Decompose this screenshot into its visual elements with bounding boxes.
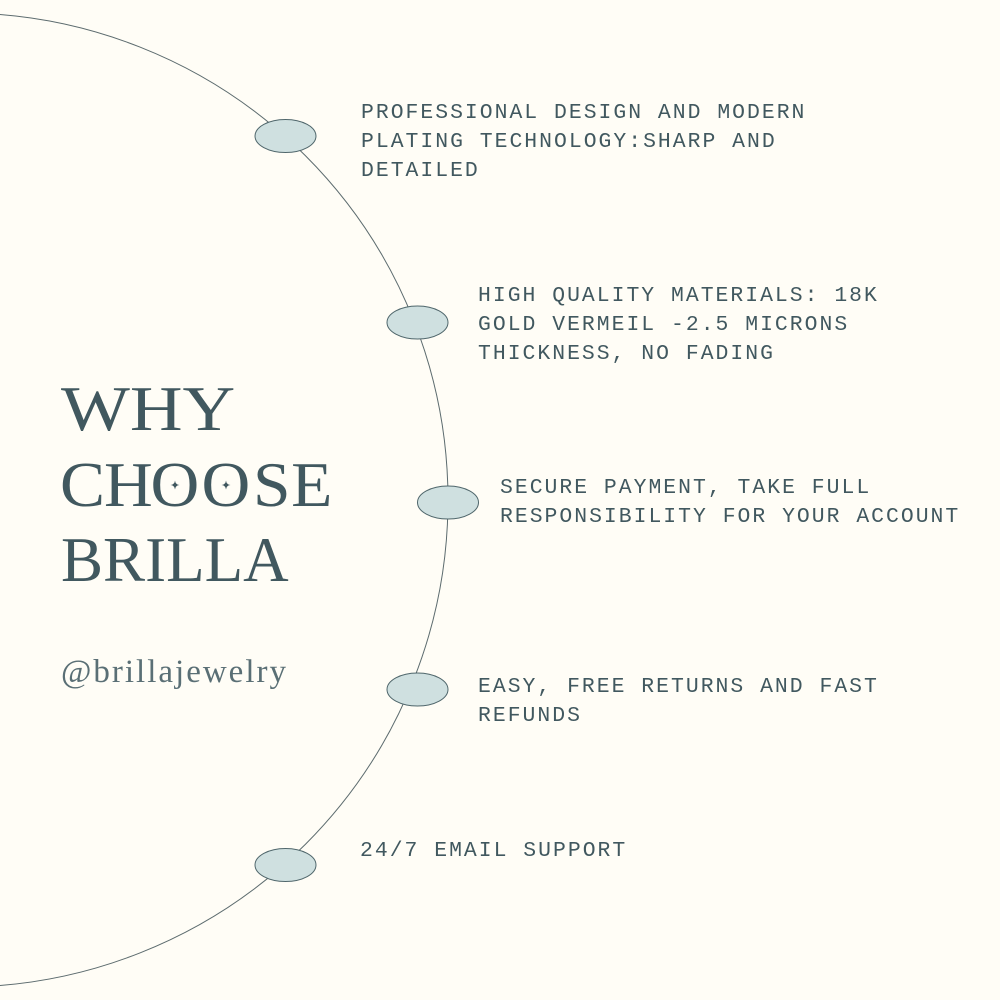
text block: design: DETAILED <box>361 159 480 183</box>
handle: @brillajewelry <box>61 654 288 690</box>
text block: design: PROFESSIONAL DESIGN AND MODERN <box>361 101 806 125</box>
text block: returns: EASY, FREE RETURNS AND FAST <box>478 675 879 699</box>
text block: materials <box>478 284 879 366</box>
text block: payment <box>500 476 960 529</box>
text block: materials: THICKNESS, NO FADING <box>478 342 775 366</box>
title <box>60 373 332 595</box>
text block: returns: REFUNDS <box>478 704 582 728</box>
text block: returns <box>478 675 879 728</box>
title: BRILLA <box>61 524 289 595</box>
title: CHOOSE <box>60 450 332 521</box>
text block: design <box>361 101 806 183</box>
text block: support: 24/7 EMAIL SUPPORT <box>360 839 627 863</box>
text block: design: PLATING TECHNOLOGY:SHARP AND <box>361 130 777 154</box>
text block: payment: RESPONSIBILITY FOR YOUR ACCOUNT <box>500 505 960 529</box>
text block: payment: SECURE PAYMENT, TAKE FULL <box>500 476 871 500</box>
text block: materials: GOLD VERMEIL -2.5 MICRONS <box>478 313 849 337</box>
icon: sparkles inside the letters O <box>170 480 230 490</box>
title: WHY <box>61 373 235 444</box>
text block: materials: HIGH QUALITY MATERIALS: 18K <box>478 284 879 308</box>
